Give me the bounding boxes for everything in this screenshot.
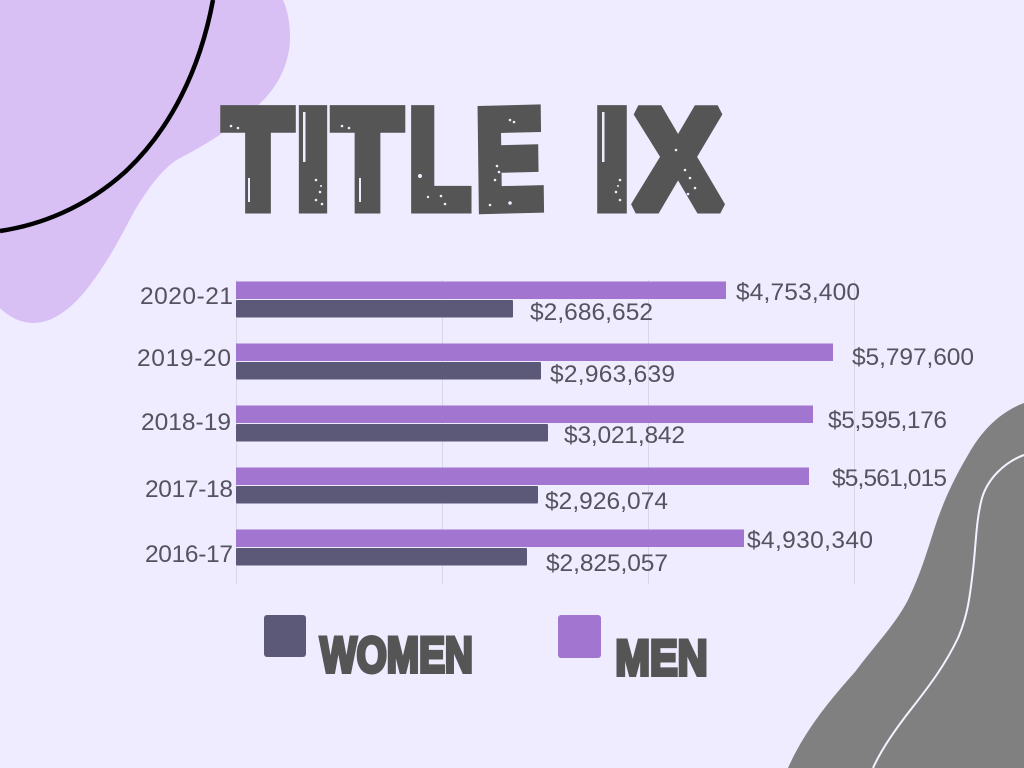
value labels: $4,753,400: [736, 279, 860, 306]
legend: women: [264, 615, 473, 683]
year labels: 2020-21: [140, 283, 233, 310]
decorative grey blob, bottom right: [788, 403, 1024, 768]
bars: 2020-21: [236, 282, 726, 318]
bars: 2017-18: [236, 468, 809, 504]
title: I: [296, 81, 330, 237]
value labels: $5,797,600: [852, 344, 974, 371]
value labels: $2,686,652: [530, 299, 653, 326]
value labels: $3,021,842: [564, 422, 685, 449]
title: T: [333, 81, 402, 237]
title: T: [224, 81, 292, 237]
year labels: 2019-20: [137, 345, 231, 372]
legend: men: [558, 615, 708, 686]
value labels: $5,561,015: [832, 465, 947, 492]
title: L: [409, 81, 470, 237]
decorative black curve: [0, 0, 213, 231]
value labels: $2,926,074: [545, 488, 668, 515]
year labels: 2017-18: [145, 476, 233, 503]
year labels: [137, 283, 233, 568]
title: E: [475, 80, 544, 238]
value labels: [530, 279, 974, 577]
year labels: 2018-19: [141, 409, 231, 436]
title: I: [594, 81, 630, 238]
title: X: [635, 81, 721, 238]
title distress specks: [230, 112, 696, 206]
value labels: $5,595,176: [828, 407, 947, 434]
bars: 2019-20: [236, 344, 833, 380]
legend: men: MEN: [615, 629, 708, 686]
bars: 2016-17: [236, 530, 744, 566]
decorative purple blob, top left: [0, 0, 290, 323]
legend: women: WOMEN: [320, 628, 473, 683]
bar chart: [137, 279, 974, 584]
bars: 2018-19: [236, 406, 813, 442]
year labels: 2016-17: [145, 541, 233, 568]
decorative white curve: [873, 455, 1024, 768]
value labels: $2,963,639: [550, 361, 675, 388]
value labels: $4,930,340: [747, 527, 873, 554]
value labels: $2,825,057: [546, 550, 668, 577]
title: [224, 80, 721, 238]
